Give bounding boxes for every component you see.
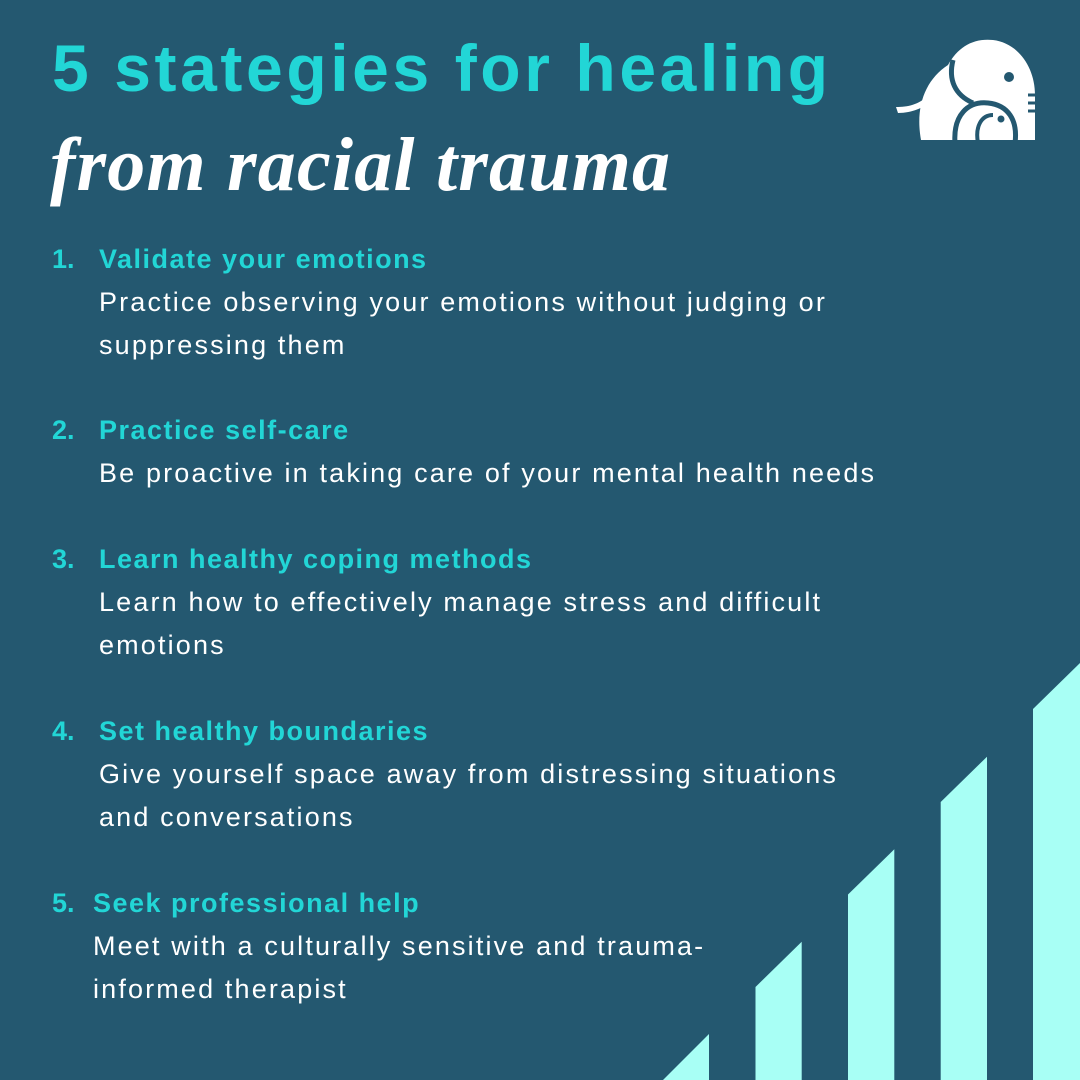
item 3: 3. <box>52 544 75 574</box>
item 1: 1. <box>52 244 75 274</box>
item 4: Give yourself space away from distressing situations <box>99 759 838 789</box>
item 1: Validate your emotions <box>99 244 428 274</box>
item 1 <box>52 244 827 360</box>
item 2: Be proactive in taking care of your mental health needs <box>99 458 876 488</box>
item 4: and conversations <box>99 802 355 832</box>
item 5: Meet with a culturally sensitive and trauma- <box>93 931 705 961</box>
item 1: Practice observing your emotions without judging or <box>99 287 827 317</box>
item 5: 5. <box>52 888 75 918</box>
item 3: emotions <box>99 630 226 660</box>
item 3: Learn healthy coping methods <box>99 544 533 574</box>
item 3: Learn how to effectively manage stress and difficult <box>99 587 822 617</box>
item 5: Seek professional help <box>93 888 420 918</box>
item 2 <box>52 415 876 488</box>
item 4: 4. <box>52 716 75 746</box>
item 5: informed therapist <box>93 974 348 1004</box>
item 5 <box>52 888 705 1004</box>
item 1: suppressing them <box>99 330 347 360</box>
item 2: Practice self-care <box>99 415 350 445</box>
title line 1: 5 stategies for healing <box>52 31 832 105</box>
item 3 <box>52 544 822 660</box>
item 4: Set healthy boundaries <box>99 716 429 746</box>
title line 2: from racial trauma <box>50 123 671 207</box>
item 4 <box>52 716 838 832</box>
item 2: 2. <box>52 415 75 445</box>
icon: elephant logo <box>896 40 1035 140</box>
